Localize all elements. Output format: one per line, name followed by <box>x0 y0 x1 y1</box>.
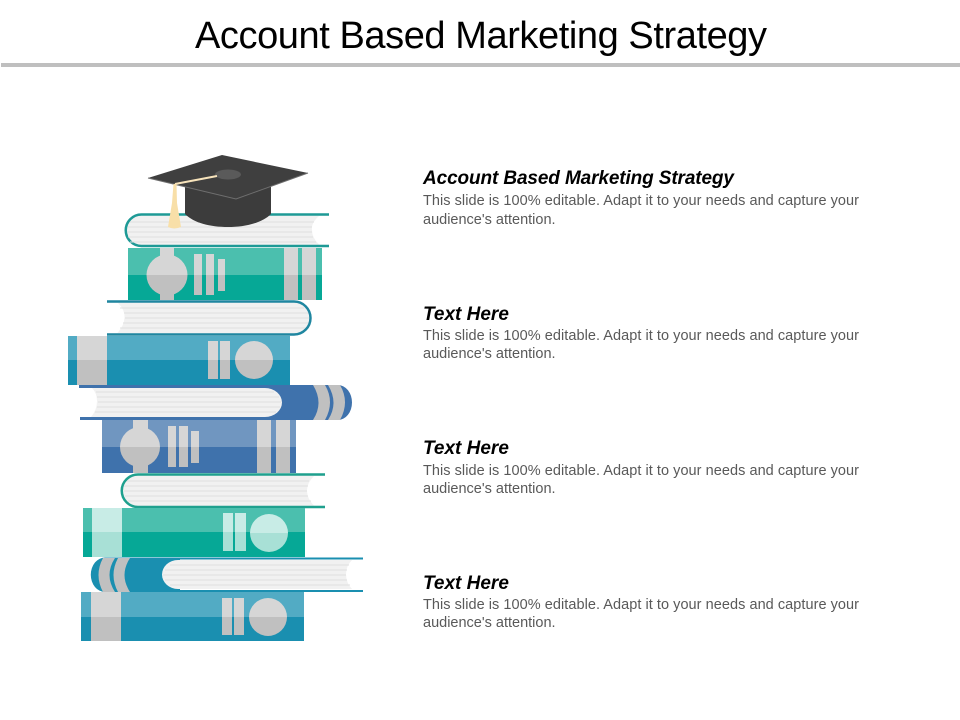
book 4: blue cover <box>68 336 290 385</box>
book 3: blue open pages <box>106 302 310 334</box>
book 9: blue book with spine <box>91 558 364 592</box>
text block 4: This slide is 100% editable. Adapt it to your needs and capture your <box>423 597 859 613</box>
book 5: navy book with spine <box>79 385 352 420</box>
book 6: navy cover <box>102 420 296 473</box>
book 2: green cover <box>128 248 322 300</box>
illustration: stack of books with graduation cap <box>68 155 364 641</box>
book 10: blue cover base <box>81 592 304 641</box>
icon: graduation cap <box>148 155 308 228</box>
text block 1: Account Based Marketing Strategy <box>422 168 735 189</box>
text block 4: audience's attention. <box>423 615 556 631</box>
text block 4 <box>423 573 859 631</box>
text block 3: This slide is 100% editable. Adapt it to your needs and capture your <box>423 463 859 479</box>
text block 2 <box>423 304 859 362</box>
text block 2: audience's attention. <box>423 346 556 362</box>
text block 2: This slide is 100% editable. Adapt it to your needs and capture your <box>423 328 859 344</box>
book 8: green cover with pale marks <box>83 508 305 557</box>
text block 1: audience's attention. <box>423 212 556 228</box>
book 1: teal open pages <box>126 214 330 246</box>
text block 4: Text Here <box>423 573 509 594</box>
book 7: green open pages <box>122 474 326 507</box>
title: Account Based Marketing Strategy <box>195 15 767 57</box>
text block 2: Text Here <box>423 304 509 325</box>
text block 3 <box>423 438 859 497</box>
text block 3: audience's attention. <box>423 481 556 497</box>
text block 1 <box>422 168 859 228</box>
text block 3: Text Here <box>423 438 509 459</box>
text block 1: This slide is 100% editable. Adapt it to your needs and capture your <box>423 193 859 209</box>
